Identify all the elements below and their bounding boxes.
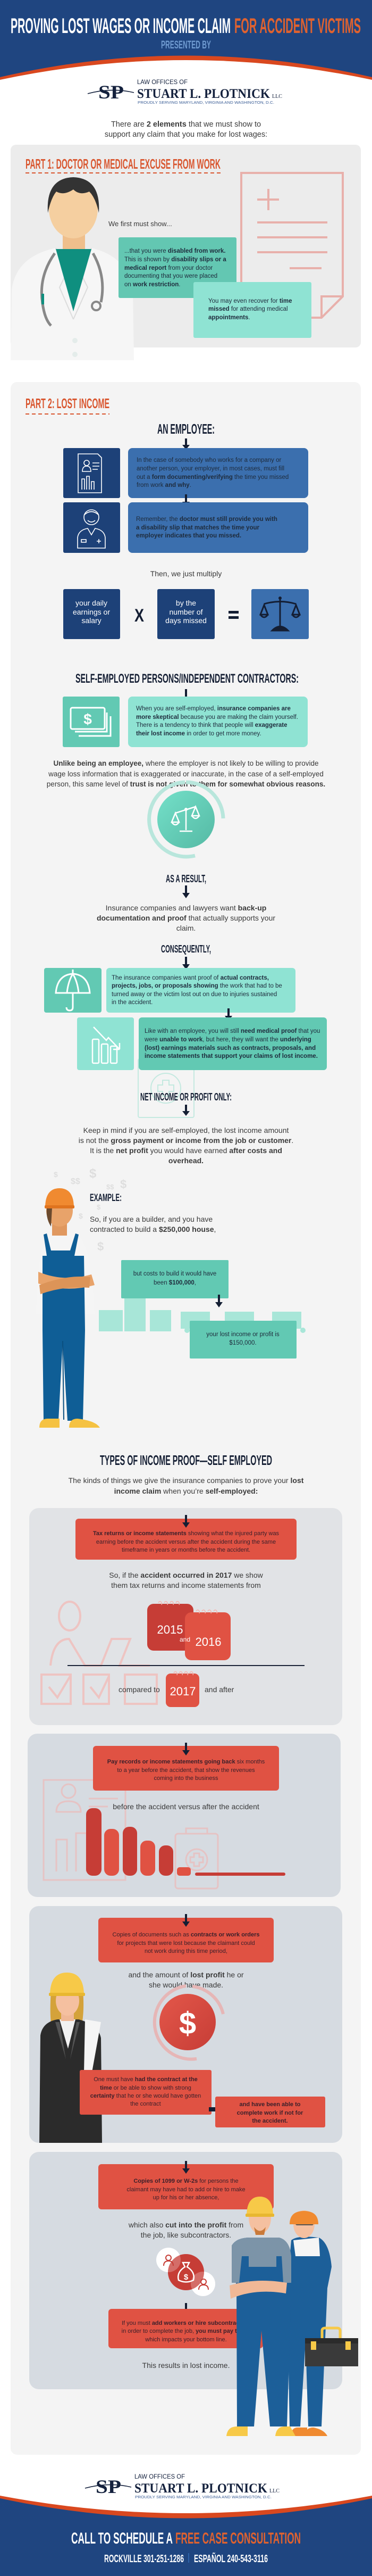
heading: as a result: AS A RESULT, xyxy=(166,873,206,885)
formula: earnings x days = compensation: by the xyxy=(176,599,196,607)
panel: tax returns: So, if the accident occurred in 2017 we show xyxy=(109,1571,264,1579)
panel: contracts or work orders: not work during this time period, xyxy=(145,1948,227,1954)
icon: dollar circle: $ xyxy=(179,2006,196,2041)
paragraph: unlike being an employee: person, this same level of trust is not given to them for somewhat obvious reasons. xyxy=(47,780,325,788)
panel: contracts or work orders xyxy=(29,1906,342,2143)
text: we first must show: We first must show... xyxy=(108,220,172,228)
callout: had the contract: time or be able to show with strong xyxy=(100,2085,191,2091)
row: insurance skeptical xyxy=(63,697,308,747)
intro text: support any claim that you make for lost wages: xyxy=(105,130,267,139)
formula: earnings x days = compensation: earnings or xyxy=(73,608,110,616)
row: actual contracts: The insurance companies want proof of actual contracts, xyxy=(112,975,269,981)
text: builder example xyxy=(90,1215,216,1233)
formula: earnings x days = compensation: your daily xyxy=(75,599,107,607)
panel: pay records: Pay records or income statements going back six months xyxy=(107,1759,265,1765)
row: actual contracts: projects, jobs, or proposals showing the work that had to be xyxy=(112,983,282,989)
text: net profit: is not the gross payment or income from the job or customer. xyxy=(79,1136,293,1145)
logo: top: SP xyxy=(98,81,124,103)
intro text: There are 2 elements that we must show to xyxy=(111,120,261,129)
text: builder example: contracted to build a $250,000 house, xyxy=(90,1225,216,1233)
callout: pay subcontractors: If you must add workers or hire subcontractors xyxy=(122,2320,250,2326)
formula: earnings x days = compensation: number of xyxy=(169,608,203,616)
callout: costs: but costs to build it would have xyxy=(133,1271,216,1277)
formula: earnings x days = compensation xyxy=(63,589,309,639)
panel: pay records: before the accident versus after the accident xyxy=(113,1802,259,1811)
row: doctor disability slip: employer indicates that you missed. xyxy=(136,533,241,539)
heading: part 2: PART 2: LOST INCOME xyxy=(26,395,109,411)
text: back-up documentation: documentation and proof that actually supports your xyxy=(97,914,275,922)
intro text xyxy=(105,120,267,139)
panel: contracts or work orders: Copies of documents such as contracts or work orders xyxy=(113,1932,259,1938)
callout: disabled from work: ...that you were disabled from work. xyxy=(124,248,225,254)
callout: medical appointments: missed for attending medical xyxy=(208,306,288,312)
illustration: two workers xyxy=(226,2197,358,2436)
row: insurance skeptical: When you are self-employed, insurance companies are xyxy=(136,706,291,712)
row: insurance skeptical: their lost income in order to get more money. xyxy=(136,731,261,737)
text: types intro: income claim when you’re self-employed: xyxy=(114,1487,258,1495)
arrow xyxy=(182,689,190,702)
panel: tax returns: compared to xyxy=(119,1685,160,1694)
decorative dollar signs xyxy=(54,1166,126,1253)
decorative dollar signs: $$ xyxy=(71,1177,80,1186)
panel: 1099 or W-2s: up for his or her absence, xyxy=(153,2194,219,2201)
callout: disabled from work: documenting that you were placed xyxy=(124,273,217,279)
arrow xyxy=(182,494,190,507)
paragraph: unlike being an employee xyxy=(47,759,325,788)
text: then we just multiply: Then, we just multiply xyxy=(150,569,222,578)
row: employer form xyxy=(63,448,308,498)
panel: tax returns: and after xyxy=(205,1685,234,1694)
panel: 1099 or W-2s: This results in lost income. xyxy=(142,2361,230,2370)
bar chart xyxy=(86,1808,285,1876)
formula: earnings x days = compensation: days missed xyxy=(165,616,207,625)
paragraph: unlike being an employee: Unlike being an employee, where the employer is not likely to be willing to provide xyxy=(54,759,318,767)
text: back-up documentation: Insurance companies and lawyers want back-up xyxy=(106,904,266,912)
text: back-up documentation xyxy=(97,904,275,932)
panel: tax returns xyxy=(29,1508,342,1725)
decorative dollar signs: $$ xyxy=(106,1183,114,1191)
row: underlying earnings: income statements that support your claims of lost income. xyxy=(145,1053,318,1059)
callout: complete work xyxy=(215,2097,325,2127)
callout: had the contract xyxy=(80,2070,212,2115)
panel: 1099 or W-2s: the job, like subcontractors. xyxy=(141,2231,231,2239)
heading: example: EXAMPLE: xyxy=(90,1192,122,1204)
formula: earnings x days = compensation: X xyxy=(134,606,144,626)
panel: tax returns: 2017 xyxy=(170,1685,196,1698)
row: insurance skeptical: There is a tendency to think that people will exaggerate xyxy=(136,722,287,728)
callout: costs: been $100,000, xyxy=(154,1280,196,1286)
row: actual contracts: turned away or the victim lost out on due to injuries sustained xyxy=(112,991,277,998)
illustration: doctor xyxy=(11,177,134,360)
callout: pay subcontractors: in order to complete the job, you must pay them, xyxy=(122,2328,250,2334)
panel: pay records xyxy=(28,1734,341,1897)
decorative dollar signs: $ xyxy=(97,1240,104,1253)
faint person at desk xyxy=(41,1602,157,1704)
row: actual contracts xyxy=(44,968,295,1013)
arrow xyxy=(225,1008,232,1021)
logo: footer: SP xyxy=(96,2476,121,2497)
faint doc and clipboard xyxy=(44,1780,218,1888)
panel: contracts or work orders: she would have made. xyxy=(149,1981,223,1989)
arrow xyxy=(182,1105,190,1116)
logo: footer xyxy=(85,2473,280,2499)
arrow xyxy=(182,957,190,970)
callout: had the contract: One must have had the contract at the xyxy=(94,2076,198,2083)
illustration: construction worker xyxy=(36,1188,100,1428)
icon: money bag with people: $ xyxy=(184,2273,189,2282)
paragraph: unlike being an employee: wage loss information that is exaggerated or inaccurate, in the case of a self-employed xyxy=(48,770,324,778)
callout: complete work: the accident. xyxy=(252,2118,288,2124)
callout: medical appointments: You may even recover for time xyxy=(208,298,292,304)
calendars: 2015 xyxy=(157,1623,183,1636)
phone numbers: ROCKVILLE 301-251-1286 xyxy=(104,2553,184,2565)
callout: lost profit: $150,000. xyxy=(229,1340,257,1346)
callout: medical appointments: appointments. xyxy=(208,314,250,321)
logo: top: STUART L. PLOTNICK xyxy=(137,87,270,101)
row: underlying earnings: (lost) earnings materials such as contracts, proposals, and xyxy=(145,1045,316,1051)
logo: top: PROUDLY SERVING MARYLAND, VIRGINIA AND WASHINGTON, D.C. xyxy=(138,100,274,105)
row: doctor disability slip: Remember, the doctor must still provide you with xyxy=(136,516,277,523)
arrow xyxy=(209,2104,223,2115)
arrow xyxy=(182,885,190,898)
logo: top: LAW OFFICES OF xyxy=(137,78,188,86)
callout: complete work: and have been able to xyxy=(240,2101,301,2108)
row: underlying earnings: were unable to work, but here, they will want the underlying xyxy=(144,1037,311,1043)
icon: dollar circle xyxy=(155,1986,223,2059)
panel: contracts or work orders: for projects that were lost because the claimant could xyxy=(117,1940,255,1947)
faint medical document xyxy=(138,1059,194,1117)
row: employer form: out a form documenting/verifying the time you missed xyxy=(137,474,289,481)
text: net profit: overhead. xyxy=(168,1156,204,1165)
decorative dollar signs: $ xyxy=(97,1203,101,1211)
decorative dollar signs: $ xyxy=(79,1212,83,1220)
calendars: 2016 xyxy=(196,1635,221,1649)
logo: top xyxy=(88,78,282,105)
callout: lost profit: your lost income or profit is xyxy=(206,1331,280,1338)
callout: had the contract: certainty that he or she would have gotten xyxy=(90,2093,201,2099)
panel: pay records: to a year before the accident, that show the revenues xyxy=(117,1767,255,1774)
row: employer form: another person, your employer, in most cases, must fill xyxy=(137,466,284,472)
panel: 1099 or W-2s: Copies of 1099 or W-2s for persons the xyxy=(133,2178,239,2184)
callout: pay subcontractors xyxy=(108,2309,263,2348)
panel: contracts or work orders: and the amount of lost profit he or xyxy=(128,1970,244,1979)
header banner xyxy=(0,0,372,93)
decorative dollar signs: $ xyxy=(120,1178,126,1191)
callout: disabled from work: medical report from your doctor xyxy=(124,265,213,271)
logo: footer: LAW OFFICES OF xyxy=(134,2473,185,2480)
callout: costs xyxy=(121,1260,229,1298)
heading: net income: NET INCOME OR PROFIT ONLY: xyxy=(140,1091,232,1103)
panel: 1099 or W-2s: claimant may have had to add or hire to make xyxy=(126,2186,246,2193)
panel: part 1 xyxy=(11,145,361,360)
illustration: businesswoman xyxy=(39,1973,102,2143)
formula: earnings x days = compensation: salary xyxy=(81,616,102,625)
panel: tax returns: them tax returns and income statements from xyxy=(111,1581,261,1589)
icon: medical document xyxy=(241,173,343,318)
call to action: CALL TO SCHEDULE A xyxy=(71,2530,173,2547)
panel: 1099 or W-2s: which also cut into the profit from xyxy=(128,2221,243,2229)
callout: disabled from work xyxy=(119,237,236,298)
logo: footer: PROUDLY SERVING MARYLAND, VIRGINIA AND WASHINGTON, D.C. xyxy=(135,2495,272,2499)
logo: top: LLC xyxy=(272,94,282,100)
row: actual contracts: in the accident. xyxy=(112,999,153,1006)
phone numbers: ESPAÑOL 240-543-3116 xyxy=(194,2553,268,2565)
panel: pay records: coming into the business xyxy=(154,1775,218,1782)
callout: pay subcontractors: which impacts your bottom line. xyxy=(145,2337,227,2343)
icon: scales circle xyxy=(149,782,223,857)
calendars: and xyxy=(180,1636,190,1643)
panel: tax returns: earning before the accident versus after the accident during the same xyxy=(96,1539,276,1545)
row: underlying earnings xyxy=(77,1017,327,1070)
row: insurance skeptical: $ xyxy=(83,711,92,727)
text: back-up documentation: claim. xyxy=(176,924,196,932)
faint buildings and trucks xyxy=(99,1282,306,1333)
callout: had the contract: the contract xyxy=(130,2101,161,2107)
decorative dollar signs: $ xyxy=(54,1170,58,1179)
text: net profit xyxy=(79,1126,293,1165)
text: net profit: It is the net profit you would have earned after costs and xyxy=(90,1146,282,1155)
row: employer form: In the case of somebody who works for a company or xyxy=(137,457,281,463)
logo: footer: LLC xyxy=(269,2488,280,2494)
callout: complete work: complete work if not for xyxy=(237,2110,303,2116)
text: builder example: So, if you are a builder, and you have xyxy=(90,1215,213,1223)
callout: disabled from work: This is shown by disability slips or a xyxy=(124,256,226,263)
decorative dollar signs: $ xyxy=(89,1166,97,1181)
panel: 1099 or W-2s xyxy=(29,2152,342,2389)
callout: medical appointments xyxy=(193,282,311,338)
heading: an employee: AN EMPLOYEE: xyxy=(157,421,215,437)
panel: tax returns: Tax returns or income statements showing what the injured party was xyxy=(93,1530,280,1537)
callout: disabled from work: on work restriction. xyxy=(124,281,180,288)
row: underlying earnings: Like with an employee, you will still need medical proof that you xyxy=(145,1028,320,1034)
panel: tax returns: timeframe in years or months before the accident. xyxy=(122,1547,250,1553)
row: insurance skeptical: more skeptical because you are making the claim yourself. xyxy=(136,714,298,720)
row: doctor disability slip xyxy=(63,502,308,553)
row: doctor disability slip: a disability slip that matches the time your xyxy=(136,525,260,531)
calendars xyxy=(147,1602,231,1660)
logo: footer: STUART L. PLOTNICK xyxy=(134,2481,268,2496)
text: net profit: Keep in mind if you are self-employed, the lost income amount xyxy=(83,1126,289,1134)
presented by: PRESENTED BY xyxy=(161,39,211,51)
heading: consequently: CONSEQUENTLY, xyxy=(161,943,211,955)
row: employer form: from work and why. xyxy=(137,482,191,488)
arrow xyxy=(182,438,190,450)
text: types intro xyxy=(69,1476,304,1495)
arrow xyxy=(182,2303,190,2316)
arrow xyxy=(215,1295,223,1307)
callout: lost profit xyxy=(190,1321,297,1359)
text: types intro: The kinds of things we give the insurance companies to prove your lost xyxy=(69,1476,304,1485)
icon: money bag with people xyxy=(156,2248,215,2296)
footer banner xyxy=(0,2488,372,2576)
